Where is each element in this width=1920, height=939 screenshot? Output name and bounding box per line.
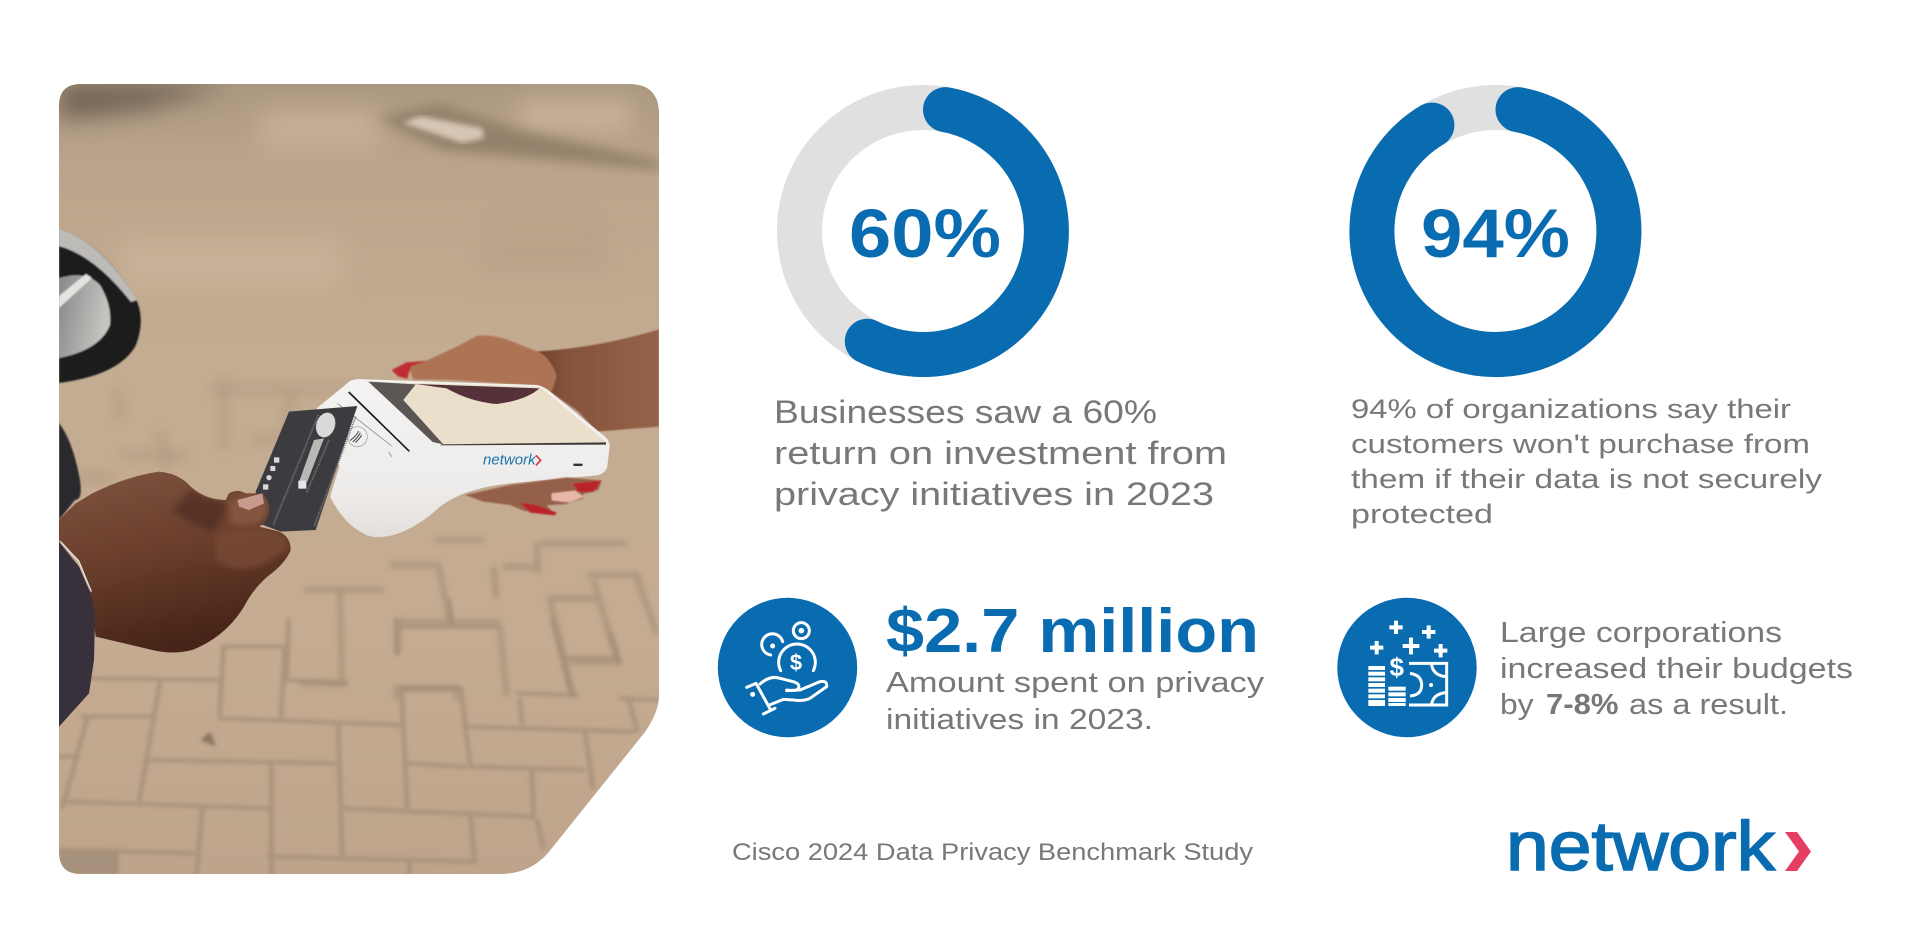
nail: thumb xyxy=(392,361,426,379)
text: budgets increased: by xyxy=(1500,689,1534,721)
nail: pale finger xyxy=(552,491,584,503)
nail: index xyxy=(573,481,602,492)
icon: hand holding coins: $ xyxy=(790,650,802,675)
text: 94% of organizations: them if their data is not securely xyxy=(1351,464,1823,494)
icon: hand holding coins xyxy=(718,598,857,737)
background: dark streak on paving xyxy=(377,104,659,170)
text: budgets increased: 7-8% xyxy=(1546,689,1619,721)
background: paving mid section xyxy=(152,382,300,464)
knuckle shading xyxy=(172,490,288,569)
right hand fingers under terminal xyxy=(465,477,602,515)
card slot xyxy=(349,392,409,451)
panel: payment photo xyxy=(59,84,659,875)
car wing mirror xyxy=(59,229,141,383)
text: amount spent: initiatives in 2023. xyxy=(886,704,1153,736)
right arm and hand above terminal xyxy=(392,329,659,432)
donut chart: 94% xyxy=(1372,108,1619,355)
background: paving right of hands xyxy=(300,540,657,700)
text: 94% of organizations: 94% of organizations say their xyxy=(1351,394,1791,424)
text: amount spent: Amount spent on privacy xyxy=(886,667,1265,699)
text: 60% return on investment: Businesses saw a 60% xyxy=(774,394,1157,430)
source note: Cisco 2024 Data Privacy Benchmark Study xyxy=(732,839,1253,866)
nail: lower xyxy=(520,503,557,515)
donut chart: 60% xyxy=(800,108,1046,355)
text: 94% of organizations xyxy=(1351,394,1823,529)
stat: $2.7 million: $2.7 million xyxy=(886,597,1259,666)
icon: coins and banknote xyxy=(1337,598,1477,737)
text: 94% of organizations: protected xyxy=(1351,499,1493,529)
logo chevron xyxy=(1785,832,1811,871)
printed brand on terminal: network xyxy=(483,453,536,469)
icon: coins and banknote: $ xyxy=(1389,652,1404,682)
payment terminal xyxy=(317,379,610,537)
text: 60% return on investment xyxy=(774,394,1227,512)
text: budgets increased: as a result. xyxy=(1629,689,1788,721)
text: budgets increased: increased their budgets xyxy=(1500,653,1853,685)
bank card xyxy=(256,406,357,532)
text: 60% return on investment: privacy initiatives in 2023 xyxy=(774,476,1214,512)
speaker xyxy=(573,464,583,466)
logo: network: network xyxy=(1506,807,1776,885)
donut value: 94%: 94% xyxy=(1421,195,1570,272)
contactless mark xyxy=(347,427,367,447)
text: amount spent xyxy=(886,667,1265,736)
shirt cuff xyxy=(61,542,91,592)
text: 60% return on investment: return on investment from xyxy=(774,435,1227,471)
text: budgets increased xyxy=(1500,617,1853,721)
car body xyxy=(59,423,81,520)
text: 94% of organizations: customers won't purchase from xyxy=(1351,429,1810,459)
printed brand on terminal xyxy=(483,454,542,466)
text: budgets increased: Large corporations xyxy=(1500,617,1782,649)
terminal screen xyxy=(368,382,607,445)
left hand with sleeve xyxy=(59,472,291,727)
suit sleeve xyxy=(59,542,95,727)
donut value: 60%: 60% xyxy=(849,195,1001,272)
background: manhole patch xyxy=(403,116,484,143)
background: lower bricks xyxy=(59,600,659,875)
background: blurred upper paving xyxy=(59,84,630,290)
thumb nail xyxy=(237,493,264,510)
